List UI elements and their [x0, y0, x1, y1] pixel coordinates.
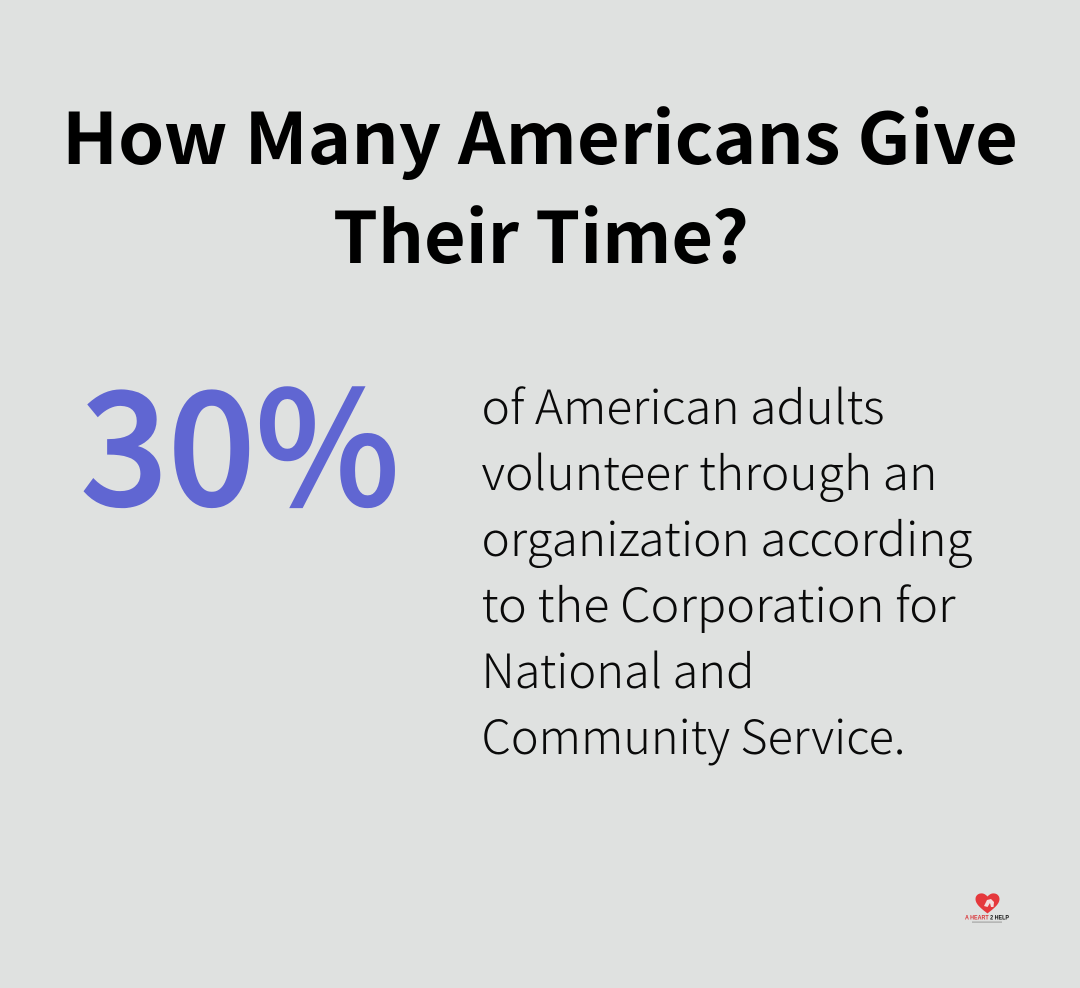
- logo: A Heart 2 Help: [965, 893, 1010, 923]
- description text: of American adults: [482, 369, 884, 438]
- title: Their Time?: [333, 182, 749, 284]
- description text: organization according: [482, 501, 972, 570]
- description text: Community Service.: [482, 699, 906, 768]
- title: [62, 83, 1018, 284]
- description text: volunteer through an: [482, 435, 938, 504]
- description text: National and: [482, 633, 754, 702]
- logo wordmark: A HEART 2 HELP: [965, 914, 1010, 922]
- logo tagline: [972, 922, 1002, 923]
- description text: [482, 369, 972, 768]
- icon: red heart with hands: [976, 893, 1000, 914]
- big statistic: 30%: 30%: [80, 324, 400, 551]
- title: How Many Americans Give: [62, 83, 1018, 185]
- description text: to the Corporation for: [482, 567, 956, 636]
